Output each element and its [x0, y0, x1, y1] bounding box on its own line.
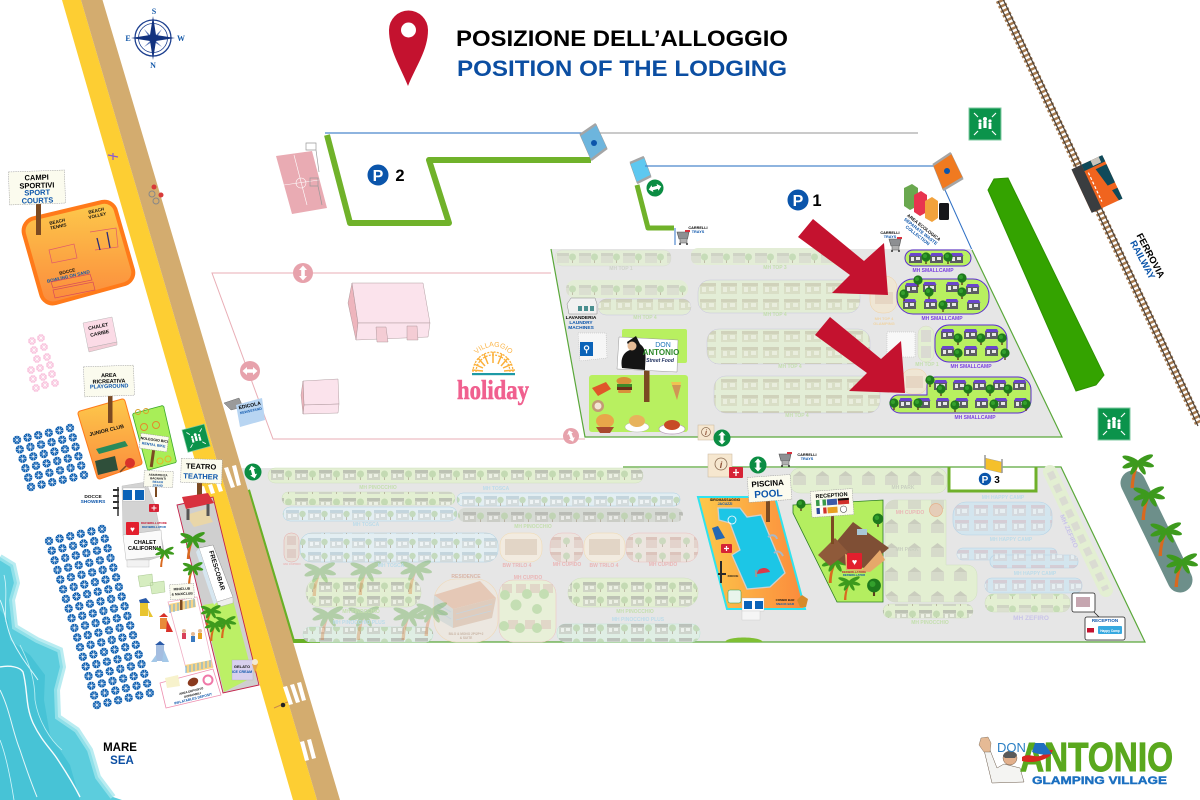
smallcamp block 2: MH SMALLCAMP [921, 316, 963, 322]
lower zone labels: MH TOSCA [353, 522, 380, 528]
chalet california [122, 482, 167, 567]
north zone labels: MH TOP 3 [763, 265, 787, 271]
cart north 1 [677, 226, 708, 245]
happy camp reception: RECEPTION [1092, 618, 1118, 623]
soccer field [276, 143, 327, 214]
beach assistance sign: STAND [153, 483, 164, 488]
cart north 1: TRAYS [692, 230, 705, 234]
newsstand [224, 398, 265, 427]
inflatables deposit: INFLATABLES DEPOSIT [174, 692, 213, 705]
food court lawn [589, 329, 688, 432]
runner on road [274, 702, 288, 708]
pool restrooms [742, 598, 764, 620]
chalet caribe: CARIBE [90, 329, 110, 339]
don antonio street food sign: Street Food [646, 358, 675, 364]
sport courts panel: BEACH [49, 217, 66, 226]
playground sign: PLAYGROUND [90, 383, 129, 391]
bike rental: RENTAL BIKE [142, 441, 166, 449]
villaggio holiday logo: holiday [457, 375, 529, 405]
drone [108, 153, 118, 160]
teatro sign [181, 458, 222, 496]
don antonio street food sign [617, 336, 679, 402]
teatro sign: TEATRO [186, 461, 217, 472]
inflatables deposit: AREA DEPOSITO [179, 686, 204, 696]
miniclub sign: & MAXICLUB [171, 591, 193, 597]
sport courts sign: CAMPI [24, 173, 49, 182]
lower zone labels: BW TRILO 4 [590, 563, 619, 569]
don antonio street food sign: ANTONIO [643, 348, 679, 357]
compass rose [125, 7, 185, 70]
large pink building [348, 283, 430, 342]
title: POSIZIONE DELL’ALLOGGIO [456, 26, 788, 51]
lower zone labels: MH TOSCA [378, 563, 405, 569]
beach assistance sign: ASSISTENZA [149, 473, 169, 477]
don antonio glamping village logo: GLAMPING VILLAGE [1032, 775, 1167, 787]
chalet california: DEFIBRILLATORE [141, 521, 167, 525]
road with cycle path [62, 0, 340, 800]
laundry: MACHINES [568, 325, 595, 331]
parking 2 sign: 2 [395, 167, 405, 185]
reception defibrillator [842, 553, 866, 577]
north zone labels: GLAMPING [873, 321, 895, 326]
inflatables deposit: GONFIABILI [183, 691, 201, 699]
emergency assembly point east [1098, 408, 1130, 440]
reception defibrillator: DEFIBRILLATOR [843, 573, 865, 577]
top strips north zone [555, 248, 934, 413]
parking 2 sign: P [373, 168, 384, 185]
gate light blue [630, 157, 651, 183]
palm beside chalet [155, 546, 175, 567]
lower zone labels: MH CUPIDO [283, 562, 301, 566]
parking 1 boundary [637, 166, 972, 250]
teatro sign: TEATHER [183, 471, 219, 482]
hedge by railway [988, 178, 1104, 391]
blue umbrellas south [45, 525, 154, 709]
laundry: LAUNDRY [569, 320, 593, 326]
zefiro diagonal strip: MH ZEFIRO [1058, 514, 1079, 549]
lower zone labels: RESIDENCE [451, 574, 481, 580]
happy camp labels: MH HAPPY CAMP [982, 495, 1025, 501]
park strip top: MH PARK [892, 485, 915, 491]
zefiro row: MH ZEFIRO [1013, 615, 1049, 622]
happy camp reception: Happy Camp [1100, 629, 1120, 633]
small hedge lower zone [725, 638, 763, 642]
parking 2 boundary [325, 133, 918, 223]
lower zone labels: BW TRILO 4 [503, 563, 532, 569]
info and medical point lower [708, 454, 743, 478]
reception sign: RECEPTION [815, 492, 848, 500]
lower zone labels: MH TOSCA [483, 486, 510, 492]
upper camp site ground [551, 249, 1062, 437]
park big area: MH CUPIDO [896, 510, 924, 516]
sport courts panel: BOCCE [59, 267, 76, 276]
lower zone labels [283, 485, 677, 626]
laundry [566, 298, 597, 331]
reception defibrillator: DEFIBRILLATORE [842, 570, 866, 574]
playground sign [83, 365, 135, 423]
cart lower zone: TRAYS [801, 457, 814, 461]
lower zone labels: MH PINOCCHIO [514, 524, 552, 530]
pool area: COMBO BAR [776, 598, 795, 602]
lower zone labels: MH PINOCCHIO [359, 485, 397, 491]
smallcamp block 1 [905, 250, 971, 274]
red arrow 2 [815, 317, 905, 393]
separate waste collection: SEPARATE WASTE [903, 217, 938, 246]
info point north [698, 425, 714, 440]
title: POSITION OF THE LODGING [457, 56, 787, 81]
railway track [998, 0, 1200, 426]
separate waste collection: AREA ECOLOGICA [906, 213, 942, 243]
separate waste collection: COLLECTION [905, 224, 931, 246]
small storage chalets [138, 574, 165, 594]
sea label: MARE [103, 742, 137, 754]
pink umbrellas [27, 334, 59, 392]
miniclub area [168, 597, 213, 673]
info point north: i [705, 430, 708, 437]
direction arrow north zone [714, 430, 730, 446]
beach assistance sign: BAGNANTI [150, 476, 166, 481]
sport courts sign: COURTS [21, 195, 53, 206]
info and medical point lower: i [720, 460, 723, 470]
lower zone labels: MH PINOCCHIO PLUS [333, 620, 386, 626]
gate blue [580, 124, 607, 160]
direction arrow lower zone [750, 456, 766, 474]
reception sign [810, 489, 854, 544]
direction arrow parking 1 [645, 178, 665, 198]
food icons [592, 377, 685, 434]
residence building [434, 579, 498, 642]
pinocchio strip beside park: MH PINOCCHIO [911, 620, 949, 626]
sport courts sign [8, 170, 66, 235]
lower zone labels: MH PINOCCHIO [616, 609, 654, 615]
sport courts sign: SPORTIVI [19, 180, 55, 191]
happy camp blocks [953, 502, 1082, 593]
reception building [818, 522, 889, 572]
smallcamp block 2 [897, 273, 989, 322]
laundry: LAVANDERIA [566, 315, 597, 321]
frescobar building [196, 545, 233, 607]
happy camp labels [982, 495, 1057, 577]
frescobar strip with stage [177, 493, 259, 693]
north zone labels [609, 265, 939, 419]
gelato [232, 659, 258, 680]
chalet caribe [83, 317, 117, 352]
pool area: DOCCE [728, 574, 738, 578]
blue umbrellas north [13, 424, 88, 491]
north zone labels: MH TOP 4 [778, 364, 802, 370]
showers [81, 487, 119, 516]
cart north 2: CARRELLI [880, 231, 900, 235]
zefiro diagonal strip [1050, 472, 1106, 590]
lower zone labels: MH CUPIDO [553, 562, 581, 568]
gate yellow [985, 455, 1002, 473]
gate orange [933, 153, 963, 190]
park strip top [790, 468, 947, 493]
parking 3 box: P [982, 475, 989, 486]
beach assistance sign [144, 471, 173, 497]
don antonio glamping village logo [979, 734, 1173, 787]
chalet california: CHALET [134, 540, 157, 546]
north zone labels: MH TOP 4 [763, 312, 787, 318]
newsstand: EDICOLA [238, 401, 262, 411]
frescobar building: FRESCOBAR [207, 550, 226, 592]
chalet california: CALIFORNIA [128, 546, 162, 552]
sport courts panel [24, 202, 133, 303]
sport courts panel: BOWLING ON SAND [46, 269, 91, 284]
holiday zone outline [212, 273, 585, 439]
cart lower zone [779, 452, 817, 467]
smallcamp block 4: MH SMALLCAMP [954, 415, 996, 421]
smallcamp block 3: MH SMALLCAMP [950, 364, 992, 370]
park big area: MH PARK [896, 547, 919, 553]
pool area: JACUZZI [718, 502, 732, 506]
junior club [78, 399, 142, 479]
lower rows of pinocchio and tosca [268, 468, 700, 642]
direction arrow left entrance [243, 462, 263, 482]
playground sign: RICREATIVA [93, 378, 126, 386]
inflatables deposit [160, 669, 221, 708]
smallcamp block 3 [935, 325, 1010, 370]
small pink building [301, 379, 339, 414]
villaggio holiday logo [457, 342, 529, 406]
palms on frescobar strip [180, 531, 237, 641]
smallcamp block 4 [889, 375, 1031, 421]
lower camp site ground [240, 467, 1145, 642]
railway label: RAILWAY [1127, 239, 1157, 282]
white service building [887, 332, 915, 357]
parking 1 sign: P [793, 193, 804, 210]
cart lower zone: CARRELLI [797, 453, 817, 457]
compass rose: S [152, 7, 157, 16]
gelato: GELATO [234, 664, 250, 669]
cupido big block contents [499, 584, 553, 633]
sea [0, 557, 122, 800]
separate waste collection [900, 184, 949, 250]
lower zone labels: MH PINOCCHIO PLUS [612, 617, 665, 623]
pool area: SNACK BAR [776, 602, 795, 606]
north zone labels: MH TOP 4 [633, 315, 657, 321]
pink zone direction arrows [240, 263, 581, 446]
zefiro row [985, 594, 1070, 622]
bike rental: NOLEGGIO BICI [140, 436, 168, 444]
palm strip [1122, 453, 1199, 587]
cart north 2: TRAYS [884, 235, 897, 239]
restrooms north [578, 333, 607, 361]
chalet california: DEFIBRILLATOR [142, 525, 167, 529]
don antonio glamping village logo: DON [997, 740, 1026, 755]
villaggio holiday logo: VILLAGGIO [474, 342, 512, 353]
reception garden [793, 499, 883, 602]
piscina pool sign: PISCINA [751, 478, 784, 489]
chalet california: ♥ [130, 525, 135, 534]
gelato: ICE CREAM [232, 670, 252, 674]
emergency assembly point west [182, 424, 210, 452]
north zone labels: MH TOP 1 [915, 362, 939, 368]
parking 3 box: 3 [994, 475, 1000, 486]
cart north 1: CARRELLI [688, 226, 708, 230]
happy camp reception [1072, 593, 1125, 640]
north zone labels: MH TOP 4 [785, 413, 809, 419]
north zone labels: MH TOP 1 [609, 266, 633, 272]
bikers [149, 184, 164, 204]
playground slides [139, 598, 173, 662]
title pin icon [389, 11, 428, 86]
happy camp labels: MH HAPPY CAMP [990, 537, 1033, 543]
piscina pool sign [747, 474, 792, 522]
newsstand: NEWSSTAND [240, 407, 263, 415]
sport courts sign: SPORT [24, 188, 51, 197]
faded palms lower zone [304, 559, 449, 640]
north zone labels: MH TOP 4 [875, 316, 894, 321]
showers: SHOWERS [81, 499, 106, 505]
lower zone labels: MH CUPIDO [649, 562, 677, 568]
cart north 2 [880, 231, 902, 252]
miniclub sign [170, 583, 194, 600]
parking 2 sign [367, 164, 405, 186]
lower zone labels: MH PINOCCHIO [342, 609, 380, 615]
sport courts panel: BEACH [88, 206, 105, 215]
playground sign: AREA [101, 373, 117, 379]
restrooms north: ⚲ [583, 344, 590, 354]
compass rose: N [150, 61, 156, 70]
sea label: SEA [110, 755, 134, 767]
parking 1 sign: 1 [812, 192, 822, 210]
happy camp labels: MH HAPPY CAMP [1014, 571, 1057, 577]
residence building: & SUITE [460, 636, 472, 640]
train [1071, 155, 1123, 213]
don antonio street food sign: DON [655, 342, 671, 349]
emergency assembly point north [969, 108, 1001, 140]
sea label [103, 742, 137, 767]
lower zone labels: MH CUPIDO [514, 575, 542, 581]
park big area [885, 500, 977, 602]
pool area [698, 497, 808, 609]
parking 1 sign [787, 189, 822, 211]
sport courts panel: TENNIS [50, 222, 67, 231]
compass rose: E [125, 34, 131, 43]
miniclub sign: MINICLUB [174, 587, 191, 591]
title [456, 26, 788, 81]
showers: DOCCE [84, 494, 102, 500]
beach assistance sign: BEACH [152, 480, 163, 484]
junior club: JUNIOR CLUB [89, 424, 125, 438]
chalet caribe: CHALET [88, 322, 109, 332]
sport courts panel: VOLLEY [88, 211, 107, 220]
reception defibrillator: ♥ [852, 557, 857, 567]
pinocchio strip beside park [883, 604, 973, 626]
railway label: FERROVIA [1134, 232, 1166, 280]
residence building: BILO & MONO 2P/2P+2 [449, 632, 484, 636]
smallcamp block 1: MH SMALLCAMP [912, 268, 954, 274]
red arrow 1 [798, 219, 888, 295]
parking 3 box [949, 467, 1036, 491]
pool area: IDROMASSAGGIO [710, 498, 741, 502]
piscina pool sign: POOL [754, 488, 783, 501]
bike rental [133, 406, 176, 470]
compass rose: W [177, 34, 185, 43]
